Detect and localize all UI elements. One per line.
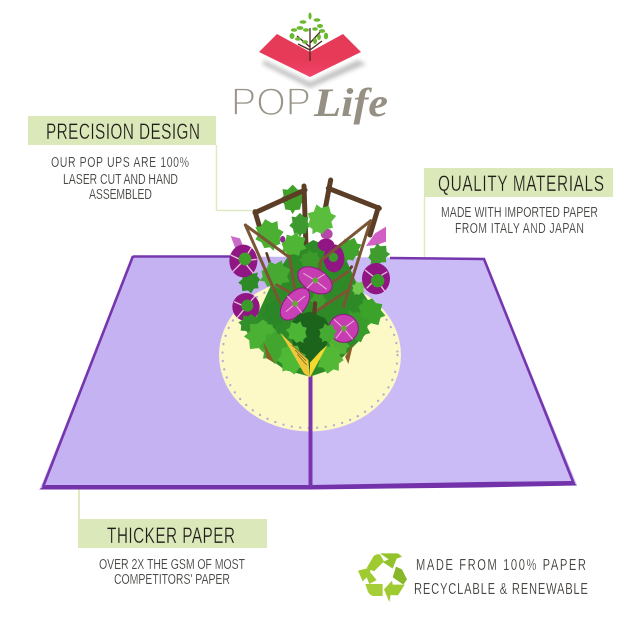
heading: QUALITY MATERIALS <box>438 172 604 197</box>
logo red open book <box>259 34 361 77</box>
body text <box>51 153 189 202</box>
logo wordmark POP: POP <box>231 81 311 124</box>
plant green mass <box>255 240 370 377</box>
flowers dark purple <box>229 239 390 321</box>
recycle statement text <box>414 555 588 597</box>
recycle statement text: RECYCLABLE & RENEWABLE <box>414 579 588 597</box>
pop-up card <box>39 256 577 490</box>
body text <box>99 555 245 587</box>
buds <box>231 227 386 250</box>
pop-up morning glory plant <box>229 180 394 377</box>
card right panel <box>310 257 577 489</box>
logo: Pop Life <box>231 12 388 125</box>
panel: thicker paper <box>78 519 267 587</box>
connector: thicker paper <box>78 489 80 519</box>
heading bar <box>424 168 613 197</box>
heading bar <box>28 116 216 145</box>
card bottom band <box>39 481 577 490</box>
body text: COMPETITORS' PAPER <box>114 570 230 587</box>
body text: OVER 2X THE GSM OF MOST <box>99 555 245 572</box>
logo wordmark Life: Life <box>313 80 388 125</box>
body text: LASER CUT AND HAND <box>63 170 178 187</box>
circle perforated dots <box>222 282 398 428</box>
heading bar <box>78 519 267 548</box>
panel: quality materials <box>424 168 613 236</box>
body text: OUR POP UPS ARE 100% <box>51 153 189 170</box>
recycle statement text: MADE FROM 100% PAPER <box>416 555 586 573</box>
card centre fold <box>308 376 312 487</box>
card purple edges <box>43 256 574 487</box>
connector: precision design <box>216 145 252 210</box>
heading: PRECISION DESIGN <box>46 120 200 145</box>
back leaf <box>280 185 306 214</box>
connector: quality materials <box>424 197 426 257</box>
leaves right cluster <box>314 291 390 376</box>
body text: MADE WITH IMPORTED PAPER <box>441 203 598 220</box>
card paper circle <box>219 278 401 432</box>
body text: FROM ITALY AND JAPAN <box>455 219 584 236</box>
trellis front <box>245 221 371 340</box>
body text <box>441 203 598 236</box>
card left panel <box>40 256 311 489</box>
body text: ASSEMBLED <box>89 185 152 202</box>
trellis back <box>255 180 379 293</box>
flowers magenta <box>275 261 358 342</box>
panel: precision design <box>28 116 216 202</box>
logo tree <box>290 12 328 61</box>
centre base: yellow pot folds <box>263 333 353 377</box>
leaves left cluster <box>234 299 290 364</box>
centre base: dark interior and front leaves <box>274 312 340 377</box>
logo shadow <box>262 60 366 88</box>
upper leaves <box>234 198 394 310</box>
icon: recycle <box>358 553 407 602</box>
heading: THICKER PAPER <box>107 524 235 549</box>
